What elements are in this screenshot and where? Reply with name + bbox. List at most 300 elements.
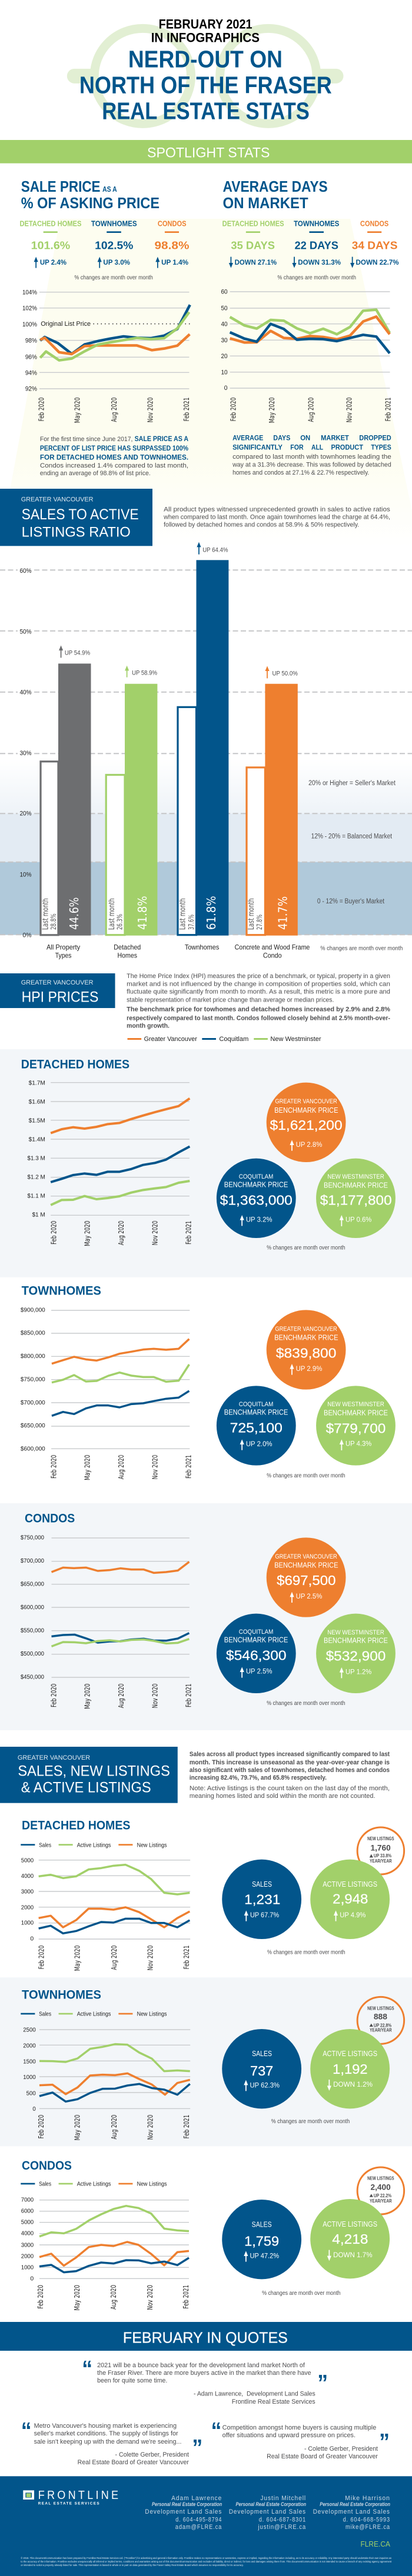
stat: detached homes: DETACHED HOMES bbox=[19, 219, 81, 228]
line chart: townhome hpi: Nov 2020 bbox=[151, 1454, 160, 1479]
stat: townhomes bbox=[292, 219, 341, 268]
line chart: townhome hpi: $650,000 bbox=[21, 1422, 45, 1429]
bubble: sales: UP 67.7% bbox=[250, 1911, 279, 1919]
bubble: coquitlam benchmark: UP 3.2% bbox=[246, 1216, 273, 1224]
text block: days on market summary: PRODUCT bbox=[331, 444, 363, 452]
heading: AS A bbox=[102, 185, 117, 193]
note: % changes are month over month bbox=[277, 274, 356, 281]
bubble: greater vancouver benchmark: BENCHMARK PRICE bbox=[274, 1561, 338, 1570]
line chart: condo sales: 4000 bbox=[21, 2230, 34, 2237]
line chart: condo hpi: $750,000 bbox=[21, 1534, 44, 1541]
line chart: detached sales: 3000 bbox=[21, 1888, 34, 1895]
line chart: detached sales: Nov 2020 bbox=[146, 1945, 155, 1970]
quote: adam lawrence: 2021 will be a bounce back year for the development land market North of bbox=[97, 2361, 305, 2369]
contact: adam lawrence: Adam Lawrence bbox=[171, 2495, 222, 2502]
legend: hpi regions: Coquitlam bbox=[219, 1035, 248, 1043]
bubble: new listings: 888 bbox=[374, 2012, 387, 2021]
disclaimer bbox=[21, 2557, 392, 2567]
bubble: new westminster benchmark bbox=[316, 1159, 396, 1238]
contact: adam lawrence: Personal Real Estate Corporation bbox=[152, 2501, 222, 2508]
quote: colette gerber, market conditions: sale isn't keeping up with the demand we're seeing... bbox=[34, 2438, 181, 2445]
line chart: townhome sales: Feb 2020 bbox=[37, 2114, 46, 2138]
line chart: townhome sales bbox=[23, 2026, 191, 2140]
line chart: townhome hpi: $700,000 bbox=[21, 1399, 45, 1406]
contact: adam lawrence: d. 604-495-8794 bbox=[175, 2516, 222, 2523]
bubble: new listings: 2,400 bbox=[370, 2183, 391, 2192]
line chart: townhome sales: May 2020 bbox=[73, 2114, 82, 2140]
line chart: townhome hpi: $900,000 bbox=[21, 1306, 45, 1313]
bubble: new listings: NEW LISTINGS bbox=[367, 1836, 394, 1842]
line chart: days on market: 0 bbox=[224, 385, 228, 392]
bubble: coquitlam benchmark: COQUITLAM bbox=[239, 1400, 273, 1408]
bubble: active listings: ACTIVE LISTINGS bbox=[323, 1880, 377, 1888]
line chart: sale price: May 2020 bbox=[73, 397, 82, 423]
heading: SALE PRICE bbox=[21, 178, 101, 195]
bubble: greater vancouver benchmark: BENCHMARK PRICE bbox=[274, 1106, 338, 1115]
y axis labels bbox=[19, 567, 32, 939]
heading bbox=[223, 178, 328, 212]
line chart: townhome hpi: $750,000 bbox=[21, 1376, 45, 1383]
bubble: greater vancouver benchmark: $839,800 bbox=[276, 1345, 336, 1360]
bar group: townhomes bbox=[178, 542, 228, 936]
line chart: detached sales: Aug 2020 bbox=[109, 1945, 118, 1970]
bar group: townhomes: UP 64.4% bbox=[202, 546, 228, 553]
legend: hpi regions: New Westminster bbox=[270, 1035, 321, 1043]
category labels bbox=[46, 944, 403, 959]
heading bbox=[21, 178, 160, 212]
line chart: condo hpi: $500,000 bbox=[21, 1650, 44, 1657]
banner: spotlight stats bbox=[0, 140, 412, 163]
bubble: sales: SALES bbox=[252, 2221, 272, 2229]
quote: colette gerber, market conditions: - Colette Gerber, President bbox=[115, 2451, 189, 2458]
panel: hpi detached homes bbox=[0, 1049, 412, 1277]
text block: days on market summary: AVERAGE bbox=[232, 435, 264, 442]
text block: days on market summary: MARKET bbox=[321, 435, 349, 442]
bubble: greater vancouver benchmark: UP 2.9% bbox=[296, 1365, 323, 1373]
line chart: condo sales: 2000 bbox=[21, 2253, 34, 2260]
bubble: new listings bbox=[357, 2167, 404, 2214]
section heading: sales, new listings and active listings: GREATER VANCOUVER bbox=[18, 1754, 90, 1761]
title kicker: IN INFOGRAPHICS bbox=[151, 30, 260, 45]
title kicker bbox=[151, 16, 260, 45]
line chart: days on market: 30 bbox=[221, 337, 228, 344]
stat: detached homes: 101.6% bbox=[31, 239, 71, 252]
line chart: sale price: 96% bbox=[25, 353, 37, 361]
line chart: condo sales bbox=[21, 2196, 190, 2311]
line chart: condo sales: 6000 bbox=[21, 2207, 34, 2214]
bubble: new listings: YEAR/YEAR bbox=[370, 2028, 392, 2033]
section heading: sales, new listings and active listings: SALES, NEW LISTINGS bbox=[18, 1763, 170, 1779]
bubble: coquitlam benchmark: 725,100 bbox=[230, 1420, 283, 1436]
contact: justin mitchell: d. 604-687-8301 bbox=[259, 2516, 306, 2523]
line chart: days on market: 60 bbox=[221, 288, 228, 295]
line chart: detached hpi: $1.7M bbox=[29, 1079, 45, 1086]
bar group: townhomes: 37.6% bbox=[187, 915, 195, 930]
line chart: detached hpi: $1 M bbox=[32, 1211, 45, 1218]
bubble: sales: 737 bbox=[250, 2063, 273, 2078]
contact: mike harrison bbox=[313, 2495, 390, 2531]
main title: NERD-OUT ON bbox=[128, 46, 283, 73]
bar group: concrete and wood frame condo: 41.7% bbox=[276, 896, 290, 930]
text block: days on market summary: SIGNIFICANTLY bbox=[232, 444, 283, 452]
line chart: condo sales: 7000 bbox=[21, 2196, 34, 2203]
category labels: Homes bbox=[118, 952, 137, 959]
category labels: Townhomes bbox=[185, 944, 219, 951]
text block: sale price summary: Condos increased 1.4% compared to last month, bbox=[40, 462, 188, 469]
legend: market thresholds bbox=[308, 779, 396, 905]
line chart: townhome sales: 2000 bbox=[23, 2042, 36, 2049]
quote: colette gerber, competition: offer situations and upward pressure on prices. bbox=[222, 2431, 355, 2439]
line chart: condo sales: 0 bbox=[30, 2275, 34, 2282]
line chart: sale price: Aug 2020 bbox=[109, 397, 118, 422]
text block: hpi intro bbox=[127, 972, 390, 1029]
bubble: greater vancouver benchmark bbox=[267, 1310, 346, 1390]
y axis labels: 30% bbox=[19, 749, 32, 757]
category labels: Condo bbox=[263, 952, 282, 959]
stat: townhomes bbox=[91, 219, 137, 268]
quote: adam lawrence: - Adam Lawrence, Development Land Sales bbox=[194, 2390, 315, 2397]
bubble: greater vancouver benchmark: GREATER VANCOUVER bbox=[275, 1325, 337, 1333]
section heading: hpi prices bbox=[0, 973, 115, 1008]
title kicker: FEBRUARY 2021 bbox=[159, 16, 252, 31]
heading: TOWNHOMES bbox=[22, 1284, 101, 1298]
line chart: days on market: Feb 2020 bbox=[229, 397, 238, 421]
bubble: new westminster benchmark: UP 4.3% bbox=[345, 1440, 372, 1448]
line chart: condo hpi: $700,000 bbox=[21, 1557, 44, 1564]
line chart: condo hpi: Nov 2020 bbox=[151, 1683, 160, 1708]
bubble: greater vancouver benchmark: GREATER VANCOUVER bbox=[275, 1097, 337, 1105]
line chart: detached hpi: $1.5M bbox=[29, 1117, 45, 1124]
stat: townhomes: TOWNHOMES bbox=[91, 219, 137, 228]
legend: hpi regions: Greater Vancouver bbox=[144, 1035, 197, 1043]
line chart: detached hpi: Aug 2020 bbox=[117, 1220, 125, 1245]
logo: frontline bbox=[23, 2489, 121, 2505]
line chart: condo sales: 3000 bbox=[21, 2241, 34, 2248]
line chart: sale price: Nov 2020 bbox=[146, 397, 155, 422]
quote: colette gerber, competition: - Colette Gerber, President bbox=[304, 2445, 378, 2452]
quote: colette gerber, market conditions: “ bbox=[21, 2417, 32, 2443]
bubble: coquitlam benchmark: $1,363,000 bbox=[220, 1192, 293, 1207]
line chart: detached sales bbox=[21, 1857, 191, 1971]
stat: condos bbox=[155, 219, 190, 268]
legend: New Listings bbox=[137, 1841, 167, 1848]
bubble: greater vancouver benchmark bbox=[267, 1083, 346, 1162]
quote: colette gerber, competition bbox=[211, 2417, 390, 2460]
line chart: condo hpi: Aug 2020 bbox=[117, 1683, 125, 1708]
note: % changes are month over month bbox=[267, 1948, 345, 1956]
legend: Sales bbox=[39, 1841, 51, 1848]
bubble: sales: UP 47.2% bbox=[250, 2252, 279, 2260]
stat: condos: CONDOS bbox=[158, 219, 187, 228]
line chart: detached hpi: May 2020 bbox=[83, 1220, 92, 1246]
line chart: townhome hpi: Feb 2020 bbox=[49, 1454, 58, 1479]
bubble: greater vancouver benchmark: GREATER VANCOUVER bbox=[275, 1553, 337, 1560]
text block: days on market summary: DAYS bbox=[273, 435, 291, 442]
line chart: townhome hpi: $600,000 bbox=[21, 1445, 45, 1452]
text block: ratio intro bbox=[163, 505, 390, 528]
bubble: active listings: DOWN 1.7% bbox=[333, 2251, 373, 2259]
quote: colette gerber, market conditions: Real Estate Board of Greater Vancouver bbox=[78, 2458, 189, 2466]
bubble: greater vancouver benchmark: UP 2.8% bbox=[296, 1141, 323, 1149]
bubble: active listings bbox=[310, 2029, 390, 2108]
quote: adam lawrence bbox=[82, 2355, 328, 2405]
bubble: sales: SALES bbox=[252, 1880, 272, 1888]
legend: New Listings bbox=[137, 2180, 167, 2187]
stat: townhomes: DOWN 31.3% bbox=[298, 259, 341, 266]
y axis labels: 60% bbox=[19, 567, 32, 575]
note: % changes are month over month bbox=[267, 1472, 345, 1479]
bar group: concrete and wood frame condo: Last month bbox=[246, 898, 255, 930]
line chart: townhome hpi: May 2020 bbox=[83, 1454, 92, 1480]
line chart: condo hpi: May 2020 bbox=[83, 1683, 92, 1709]
line chart: detached hpi: Feb 2021 bbox=[184, 1221, 193, 1244]
contact: adam lawrence bbox=[145, 2495, 222, 2531]
legend: Sales bbox=[39, 2180, 51, 2187]
bubble: coquitlam benchmark: UP 2.0% bbox=[246, 1440, 273, 1448]
line chart: sale price: 94% bbox=[25, 369, 37, 376]
section heading: hpi prices: HPI PRICES bbox=[22, 989, 98, 1005]
quote: colette gerber, market conditions: Metro Vancouver's housing market is experiencing bbox=[34, 2422, 177, 2430]
panel: sale price as a percent of asking price bbox=[19, 178, 191, 477]
bubble: greater vancouver benchmark: BENCHMARK PRICE bbox=[274, 1334, 338, 1342]
line chart: townhome sales: 1000 bbox=[23, 2074, 36, 2081]
chart bands bbox=[0, 570, 412, 935]
quote: adam lawrence: the Fraser River. There are more buyers active in the market than there have bbox=[97, 2369, 311, 2377]
bubble: active listings: 4,218 bbox=[332, 2231, 368, 2247]
bubble: coquitlam benchmark bbox=[217, 1614, 296, 1693]
bar group: detached homes: Last month bbox=[107, 898, 117, 930]
line chart: detached hpi: $1.2 M bbox=[27, 1173, 45, 1180]
line chart: townhome sales: Feb 2021 bbox=[182, 2115, 191, 2138]
bubble: sales: 1,759 bbox=[244, 2233, 279, 2248]
stat: detached homes: UP 2.4% bbox=[40, 259, 67, 266]
stat: condos: 34 DAYS bbox=[352, 239, 397, 252]
line chart: detached sales: May 2020 bbox=[73, 1945, 82, 1971]
bubble: new westminster benchmark bbox=[316, 1614, 396, 1693]
stat: condos bbox=[350, 219, 399, 268]
panel: hpi townhomes bbox=[21, 1284, 396, 1480]
bubble: coquitlam benchmark: BENCHMARK PRICE bbox=[224, 1636, 288, 1644]
bar group: townhomes: 61.8% bbox=[205, 896, 219, 930]
line chart: sale price: 98% bbox=[25, 337, 37, 344]
line chart: detached sales: 1000 bbox=[21, 1919, 34, 1926]
note: % changes are month over month bbox=[271, 2118, 350, 2125]
contact: adam lawrence: Development Land Sales bbox=[145, 2508, 222, 2515]
bubble: active listings: UP 4.9% bbox=[340, 1911, 366, 1919]
bubble: new listings: 1,760 bbox=[370, 1843, 391, 1853]
heading: CONDOS bbox=[22, 2158, 72, 2173]
quote: adam lawrence: Frontline Real Estate Services bbox=[232, 2398, 315, 2405]
bubble: coquitlam benchmark bbox=[217, 1386, 296, 1466]
bar group: detached homes bbox=[106, 666, 157, 936]
line chart: condo hpi: $450,000 bbox=[21, 1673, 44, 1680]
line chart: townhome sales: 0 bbox=[32, 2105, 36, 2113]
bar group: detached homes: 41.8% bbox=[136, 896, 150, 930]
bar group: all property types: 44.6% bbox=[68, 897, 82, 930]
line chart: sale price: 104% bbox=[22, 289, 37, 296]
bubble: greater vancouver benchmark: UP 2.5% bbox=[296, 1593, 323, 1600]
bubble: new listings: UP 33.8% bbox=[374, 1853, 392, 1859]
panel: sales condos bbox=[21, 2158, 404, 2311]
stat: townhomes: 22 DAYS bbox=[294, 239, 338, 252]
bubble: new westminster benchmark: UP 1.2% bbox=[345, 1669, 372, 1676]
bubble: active listings: ACTIVE LISTINGS bbox=[323, 2220, 377, 2228]
line chart: condo sales: Feb 2020 bbox=[36, 2285, 45, 2309]
section heading: sales to active listings ratio: SALES TO ACTIVE bbox=[22, 507, 139, 523]
bar group: all property types: 28.8% bbox=[49, 913, 58, 930]
bubble: new listings: YEAR/YEAR bbox=[370, 1858, 392, 1864]
line chart: townhome hpi: $800,000 bbox=[21, 1353, 45, 1360]
text block: days on market summary: TYPES bbox=[371, 444, 391, 452]
legend bbox=[21, 1841, 167, 1848]
line chart: condo sales: 5000 bbox=[21, 2218, 34, 2225]
bubble: greater vancouver benchmark: $697,500 bbox=[277, 1573, 336, 1588]
y axis labels: 20% bbox=[19, 809, 32, 817]
line chart: townhome hpi bbox=[21, 1306, 193, 1480]
bar group: townhomes: Last month bbox=[178, 898, 187, 930]
quote: colette gerber, competition: ” bbox=[379, 2428, 390, 2454]
line chart: detached hpi: $1.4M bbox=[29, 1136, 45, 1143]
bubble: coquitlam benchmark: $546,300 bbox=[226, 1648, 287, 1663]
legend: Active Listings bbox=[77, 2180, 111, 2187]
line chart: condo sales: May 2020 bbox=[72, 2285, 81, 2311]
line chart: detached sales: 5000 bbox=[21, 1857, 34, 1864]
bubble: coquitlam benchmark bbox=[217, 1159, 296, 1238]
logo: frontline: REAL ESTATE SERVICES bbox=[38, 2502, 100, 2505]
main title bbox=[79, 46, 332, 125]
line chart: days on market: 40 bbox=[221, 321, 228, 328]
line chart: days on market: May 2020 bbox=[268, 397, 276, 423]
line chart: days on market: Feb 2021 bbox=[384, 398, 393, 421]
quote: adam lawrence: ” bbox=[317, 2370, 328, 2395]
bubble: sales: UP 62.3% bbox=[250, 2081, 280, 2090]
line chart: detached sales: 4000 bbox=[21, 1873, 34, 1880]
heading: % OF ASKING PRICE bbox=[21, 194, 160, 212]
line chart: condo hpi: $650,000 bbox=[21, 1580, 44, 1587]
bubble: new listings: UP 22.8% bbox=[374, 2023, 392, 2028]
text block: sale price summary: PERCENT OF LIST PRICE HAS SURPASSED 100% bbox=[40, 445, 188, 452]
line chart: days on market: 50 bbox=[221, 305, 228, 312]
banner: february in quotes bbox=[0, 2322, 412, 2351]
line chart: sale price: 102% bbox=[22, 305, 37, 312]
bubble: greater vancouver benchmark bbox=[267, 1537, 346, 1617]
panel: sales detached homes bbox=[21, 1818, 404, 1971]
stat: condos: 98.8% bbox=[155, 239, 190, 252]
legend: Active Listings bbox=[77, 2010, 111, 2017]
bubble: active listings: DOWN 1.2% bbox=[333, 2081, 373, 2088]
icon: glasses background bbox=[74, 28, 336, 124]
legend bbox=[21, 2180, 167, 2187]
line chart: condo hpi: $550,000 bbox=[21, 1627, 44, 1634]
line chart: townhome sales: 1500 bbox=[23, 2058, 36, 2065]
contact: justin mitchell: Personal Real Estate Corporation bbox=[235, 2501, 306, 2508]
line chart: townhome sales: 2500 bbox=[23, 2026, 36, 2033]
line chart: detached sales: Feb 2021 bbox=[182, 1946, 191, 1969]
contact: mike harrison: Mike Harrison bbox=[345, 2495, 390, 2502]
line chart: townhome hpi: Aug 2020 bbox=[117, 1454, 125, 1479]
line chart: days on market: Aug 2020 bbox=[307, 397, 315, 422]
banner: spotlight stats: SPOTLIGHT STATS bbox=[147, 145, 270, 161]
line chart: condo sales: Feb 2021 bbox=[182, 2285, 190, 2309]
legend: Sales bbox=[39, 2010, 51, 2017]
panel: average days on market bbox=[221, 178, 399, 476]
bubble: active listings bbox=[310, 2199, 390, 2278]
quote: adam lawrence: “ bbox=[82, 2355, 92, 2381]
stat: townhomes: UP 3.0% bbox=[103, 259, 130, 266]
bubble: new westminster benchmark: $779,700 bbox=[326, 1421, 386, 1436]
line chart: days on market: Nov 2020 bbox=[345, 397, 354, 422]
section heading: sales to active listings ratio bbox=[0, 489, 152, 546]
text block: sale price summary: For the first time since June 2017, bbox=[40, 435, 132, 443]
bar group: concrete and wood frame condo: 27.8% bbox=[255, 915, 264, 930]
contact: justin mitchell: justin@FLRE.ca bbox=[258, 2524, 306, 2531]
quote: colette gerber, market conditions: seller's market conditions. The supply of listings for bbox=[34, 2430, 178, 2437]
disclaimer: or intended to solicit a property already listed for sale. This representation is based in whole or in part on data generated by the Fraser Valley Real Estate Board which assumes no responsibility for its accuracy. bbox=[21, 2564, 244, 2567]
bubble: sales bbox=[222, 2200, 301, 2279]
banner: february in quotes: FEBRUARY IN QUOTES bbox=[123, 2329, 288, 2346]
stat: townhomes: TOWNHOMES bbox=[294, 219, 339, 228]
legend: Active Listings bbox=[77, 1841, 111, 1848]
panel: hpi condos bbox=[0, 1503, 412, 1730]
line chart: condo sales: Nov 2020 bbox=[146, 2285, 154, 2310]
contact: justin mitchell: Justin Mitchell bbox=[260, 2495, 306, 2502]
line chart: condo hpi: Feb 2021 bbox=[184, 1684, 193, 1707]
note: % changes are month over month bbox=[267, 1700, 345, 1707]
bubble: new westminster benchmark: $1,177,800 bbox=[320, 1192, 392, 1207]
line chart: sale price: Original List Price bbox=[41, 321, 91, 328]
bubble: sales: 1,231 bbox=[244, 1892, 280, 1907]
y axis labels: 0% bbox=[22, 931, 32, 939]
line chart: days on market: 20 bbox=[221, 353, 228, 360]
panel: sales townhomes bbox=[0, 1977, 412, 2146]
section heading: sales to active listings ratio: LISTINGS RATIO bbox=[22, 524, 131, 540]
quote: adam lawrence: been for quite some time. bbox=[97, 2377, 167, 2384]
stat: condos: UP 1.4% bbox=[161, 259, 188, 266]
category labels: Concrete and Wood Frame bbox=[235, 944, 310, 951]
contact: adam lawrence: adam@FLRE.ca bbox=[175, 2524, 222, 2531]
text block: sale price summary: ending an average of 98.8% of list price. bbox=[40, 469, 151, 477]
bubble: new listings bbox=[357, 1997, 404, 2044]
text block: sale price summary bbox=[40, 435, 188, 477]
stat: condos: CONDOS bbox=[360, 219, 388, 228]
bubble: coquitlam benchmark: COQUITLAM bbox=[239, 1173, 273, 1180]
stat: detached homes: DETACHED HOMES bbox=[222, 219, 284, 228]
section heading: sales, new listings and active listings bbox=[0, 1747, 178, 1803]
stat: detached homes: DOWN 27.1% bbox=[235, 259, 277, 266]
y axis labels: 40% bbox=[19, 689, 32, 696]
heading: ON MARKET bbox=[223, 194, 308, 212]
text block: sales intro bbox=[190, 1750, 390, 1800]
section heading: hpi prices: GREATER VANCOUVER bbox=[21, 979, 94, 986]
bar group: concrete and wood frame condo bbox=[246, 666, 298, 936]
bubble: new westminster benchmark: $532,900 bbox=[326, 1648, 386, 1663]
legend: New Listings bbox=[137, 2010, 167, 2017]
bar group: detached homes: 26.3% bbox=[115, 914, 124, 930]
contact: justin mitchell: Development Land Sales bbox=[229, 2508, 306, 2515]
bubble: new westminster benchmark: UP 0.6% bbox=[345, 1216, 372, 1224]
line chart: sale price: Feb 2021 bbox=[182, 398, 191, 421]
panel: sales to active listings ratio bbox=[0, 489, 412, 959]
bubble: active listings bbox=[310, 1860, 390, 1939]
header: title block bbox=[74, 16, 336, 125]
line chart: condo sales: Aug 2020 bbox=[109, 2285, 118, 2310]
stat: townhomes: 102.5% bbox=[95, 239, 134, 252]
line chart: sale price: 100% bbox=[22, 321, 37, 328]
footer bbox=[0, 2476, 412, 2576]
bubble: new listings: NEW LISTINGS bbox=[367, 2176, 394, 2181]
bar group: all property types: UP 54.9% bbox=[65, 649, 90, 656]
heading: CONDOS bbox=[25, 1511, 75, 1525]
